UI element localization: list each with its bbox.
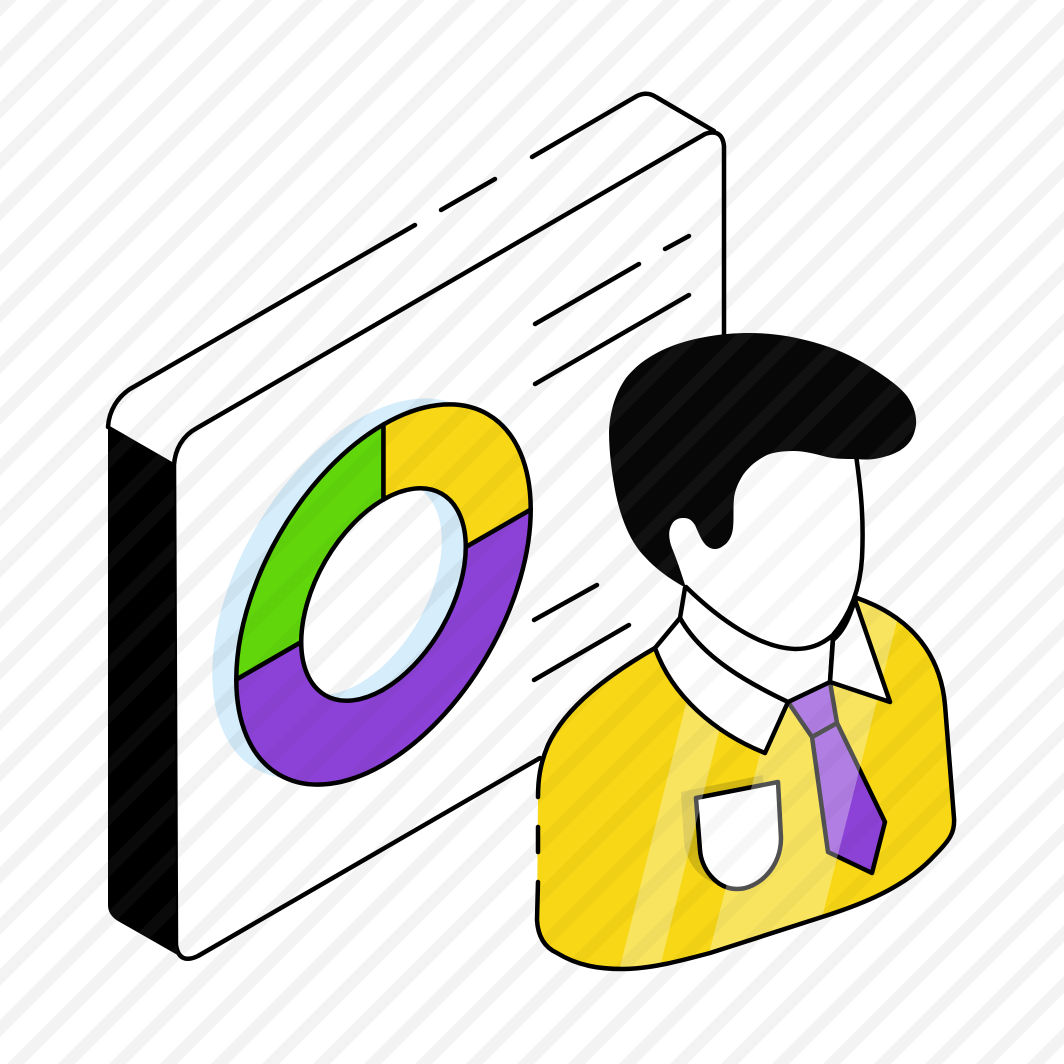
right collar — [830, 600, 890, 702]
stripes on black areas — [108, 333, 916, 957]
board black side — [108, 425, 188, 961]
tie knot — [788, 682, 837, 737]
sweater outline — [537, 598, 954, 969]
panel: presentation board — [108, 93, 724, 961]
green segment — [236, 424, 384, 680]
yellow segment — [384, 340, 531, 594]
sweater fill — [537, 598, 954, 969]
tie — [788, 682, 885, 873]
donut shadow — [212, 334, 507, 844]
hair — [609, 333, 916, 588]
purple segment — [236, 510, 531, 850]
board front outline — [174, 132, 724, 959]
sweater light strips — [618, 590, 905, 975]
face fill — [660, 440, 863, 649]
pocket shadow — [681, 775, 765, 884]
text placeholder lines lower — [534, 585, 629, 680]
neck and shirt — [680, 588, 833, 702]
tie blade — [812, 723, 885, 873]
text placeholder lines upper — [535, 236, 689, 384]
light strip left — [620, 702, 719, 967]
board top edge white surface — [108, 93, 714, 463]
donut chart — [236, 340, 531, 850]
board front face — [174, 132, 724, 959]
face outline — [686, 455, 863, 649]
pocket — [696, 782, 781, 889]
person — [537, 333, 954, 975]
left collar — [655, 618, 788, 753]
light strip right — [710, 600, 897, 951]
board top outline segments — [108, 94, 714, 427]
